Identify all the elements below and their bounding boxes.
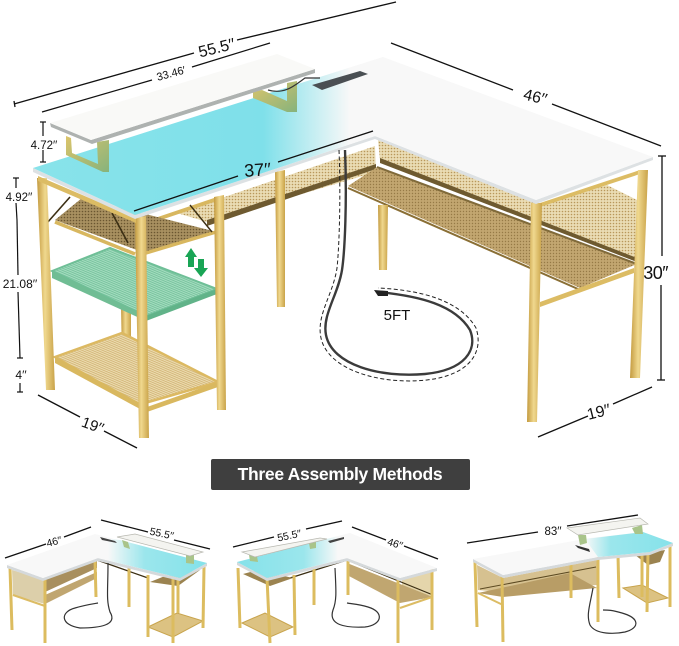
plug	[374, 290, 388, 296]
cross bar	[478, 593, 503, 605]
power cord	[325, 150, 472, 375]
stand legs	[578, 525, 643, 545]
dimension: overall width 55.5	[14, 2, 396, 107]
cross bar	[400, 597, 432, 608]
tower shelves	[148, 613, 203, 637]
wing shelf	[45, 572, 97, 604]
dimension: stand width 33.46: 33.46′	[155, 64, 187, 84]
LED blue surface	[237, 533, 350, 578]
back rail	[347, 560, 433, 595]
tower right leg	[214, 195, 226, 410]
bottom tower shelf	[55, 333, 218, 412]
right wing shelf	[347, 563, 433, 603]
right wing under-desk rail	[380, 158, 637, 262]
right wing front leg	[527, 203, 542, 422]
dimension: wing depth 19	[538, 387, 652, 437]
desktop	[7, 534, 207, 578]
power strip	[328, 537, 344, 543]
wing underside	[45, 560, 97, 592]
folding brace left	[47, 197, 70, 223]
tower lower shelf	[242, 613, 293, 637]
legs	[10, 560, 204, 643]
right wing cross bar	[540, 268, 634, 307]
dimension: shelf span 21.08: 21.08′′	[3, 277, 38, 291]
left monitor stand leg	[66, 136, 109, 172]
tower upper shelf	[150, 570, 200, 586]
dimension: overall width 55.5: 55.5′′	[197, 36, 237, 61]
tower top mesh shelf	[55, 198, 217, 253]
tower front-left leg	[37, 178, 55, 390]
right wing top rail	[540, 170, 640, 207]
dimension 55.5	[101, 520, 210, 549]
left wing rear leg	[275, 170, 285, 307]
thumbnail: layout three	[467, 515, 673, 642]
wing rails	[480, 567, 596, 589]
dimension: stand height 4.72: 4.72′′	[31, 140, 57, 152]
desktop edge	[7, 558, 207, 581]
tower upper shelf	[243, 570, 293, 586]
power strip	[312, 71, 368, 90]
dimension: wing length 46	[391, 43, 661, 146]
wing shelf	[478, 573, 597, 597]
dimension 55.5: 55.5′′	[148, 526, 175, 542]
dimension: inner width 37: 37′′	[244, 159, 272, 181]
right wing shelf front edge	[348, 188, 578, 289]
dimension: foot clearance 4: 4′′	[15, 368, 27, 382]
thumbnail: layout two	[233, 521, 438, 643]
monitor stand underside	[50, 69, 315, 144]
green adjustable shelf	[52, 248, 217, 321]
desktop	[473, 532, 673, 575]
dimension 83: 83′′	[544, 526, 562, 538]
dimension: wing length 46: 46′′	[521, 87, 549, 109]
bottom shelf front-right bar	[147, 382, 218, 412]
legs	[238, 560, 432, 643]
dimension: tower depth 19	[38, 395, 137, 448]
right wing mesh shelf	[348, 167, 637, 288]
label: cord length 5FT: 5FT	[384, 307, 410, 324]
desktop	[237, 533, 437, 578]
monitor stand	[242, 538, 327, 557]
stand legs	[249, 541, 316, 562]
tower lower shelf	[623, 585, 668, 603]
cord	[64, 563, 112, 628]
folding brace right	[190, 205, 212, 232]
LED blue surface	[585, 532, 673, 557]
inner corner leg	[378, 205, 388, 270]
left end panel	[12, 570, 45, 604]
right wing rear leg	[630, 170, 648, 378]
dimension 46	[5, 527, 91, 558]
banner: three assembly methods	[211, 459, 470, 490]
dimension: tower depth 19: 19′′	[79, 414, 106, 438]
dimension 46: 46′′	[45, 534, 63, 550]
main L-shaped desk	[33, 54, 653, 438]
tower front corner leg	[135, 216, 149, 438]
stand legs	[122, 540, 194, 564]
dimension 46	[352, 527, 438, 559]
tower top left rail	[38, 176, 136, 223]
dimension: shelf span 21.08	[3, 220, 38, 358]
legs	[475, 543, 670, 642]
dimension 55.5: 55.5′′	[276, 528, 303, 544]
cord	[588, 588, 636, 633]
bottom shelf surface	[55, 333, 218, 405]
LED blue surface	[98, 538, 207, 578]
left wing front rail	[143, 197, 217, 226]
dimension: foot clearance 4	[15, 368, 27, 392]
desktop edge	[473, 543, 673, 578]
tower upper shelf	[635, 550, 665, 565]
bottom shelf front-left bar	[55, 357, 140, 409]
right wing panel	[402, 570, 432, 596]
shelf surface	[52, 248, 217, 316]
back rail	[97, 560, 148, 578]
cross bar	[13, 595, 45, 606]
banner: three assembly methods: Three Assembly Methods	[238, 464, 443, 484]
left back rail	[290, 560, 347, 578]
desktop surface	[33, 57, 653, 215]
monitor stand	[567, 518, 648, 535]
left wing under-desk rail	[207, 164, 376, 226]
power strip cable	[268, 78, 320, 91]
dimension: height 30: 30′′	[643, 263, 669, 283]
dimension: clearance 4.92	[6, 178, 32, 220]
dimension 83	[467, 515, 638, 543]
dimension: wing depth 19: 19′′	[585, 402, 613, 424]
desktop edge thickness	[33, 136, 653, 219]
desktop edge	[237, 558, 437, 581]
tower shelf side bar	[146, 232, 216, 253]
tower rear leg	[121, 305, 131, 363]
dimension 46: 46′′	[386, 536, 404, 552]
monitor stand top	[50, 54, 315, 140]
thumbnail: layout one	[5, 520, 210, 643]
dimension: inner width 37	[134, 131, 373, 211]
folding brace centre	[112, 213, 128, 243]
shelf front-right lip	[146, 289, 217, 321]
right monitor stand leg	[253, 81, 297, 112]
dimension 55.5	[233, 521, 342, 547]
left wing back mesh panel	[177, 146, 376, 222]
dimension: stand width 33.46	[42, 43, 270, 112]
tower shelf front bars	[55, 222, 135, 254]
cord	[332, 568, 379, 627]
right wing shelf rear rail	[377, 167, 637, 264]
right wing back mesh panel	[378, 140, 637, 262]
cord reach dashed outline	[320, 150, 478, 381]
dimension: clearance 4.92: 4.92′′	[6, 192, 32, 204]
dimension: stand height 4.72	[31, 122, 57, 162]
power strip	[100, 537, 117, 543]
desktop surface with blue LED glow	[33, 57, 383, 215]
power strip	[575, 545, 590, 552]
icon: green up and down arrows	[185, 248, 208, 277]
monitor stand	[117, 534, 203, 556]
shelf front-left lip	[52, 271, 146, 321]
wing back panel	[477, 560, 597, 592]
